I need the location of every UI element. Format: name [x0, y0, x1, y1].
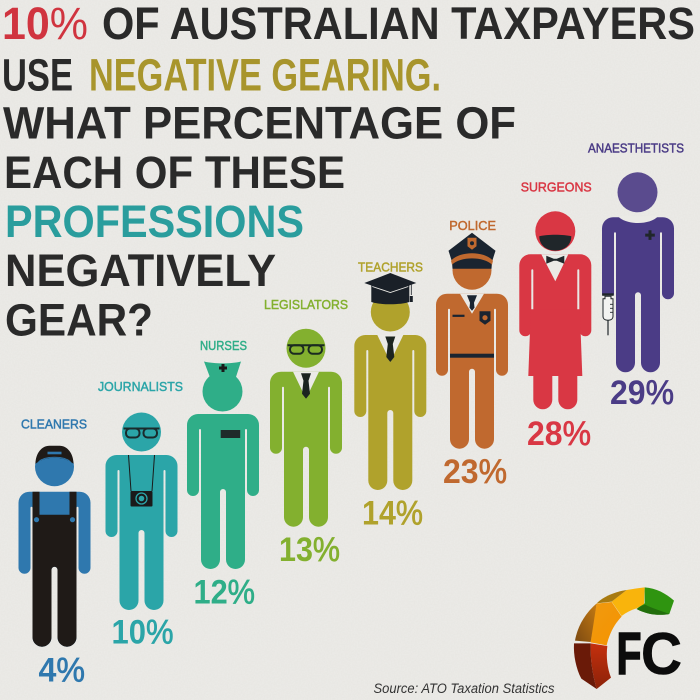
icon: mortarboard	[364, 273, 416, 304]
profession: anaesthetists: ANAESTHETISTS	[588, 140, 684, 155]
profession: police	[436, 218, 508, 491]
icon: glasses	[124, 428, 160, 438]
gauge: green segment	[637, 587, 674, 615]
title: WHAT PERCENTAGE OF	[3, 98, 516, 148]
profession: surgeons: 28%	[527, 415, 591, 453]
title: NEGATIVE GEARING.	[89, 50, 441, 100]
profession: journalists: 10%	[112, 613, 174, 651]
gauge: orange segment	[591, 602, 622, 645]
title: PROFESSIONS	[5, 196, 304, 247]
title	[2, 0, 695, 346]
profession: nurses: 12%	[194, 573, 255, 611]
profession: teachers: 14%	[362, 494, 423, 532]
title: EACH OF THESE	[4, 147, 345, 198]
profession: anaesthetists: 29%	[610, 374, 674, 412]
profession: legislators: 13%	[279, 531, 340, 569]
title: USE	[2, 50, 73, 100]
profession: legislators	[264, 297, 348, 569]
profession: surgeons	[519, 180, 592, 453]
logo: FC gauge: C	[641, 621, 682, 687]
profession: police: 23%	[443, 453, 507, 491]
gauge: green underside	[637, 605, 669, 615]
logo: FC gauge	[574, 587, 682, 689]
profession: cleaners: 4%	[38, 652, 85, 690]
title: GEAR?	[5, 294, 153, 346]
gauge: orange shadow	[575, 603, 597, 642]
gauge: yellow segment	[612, 587, 645, 616]
icon: camera	[128, 455, 154, 506]
logo: FC gauge: F	[616, 621, 642, 687]
profession: police: POLICE	[449, 218, 496, 233]
profession: surgeons: SURGEONS	[521, 180, 592, 195]
icon: police hat	[448, 233, 496, 269]
profession: journalists: JOURNALISTS	[98, 379, 183, 394]
icon: bow tie	[546, 256, 564, 264]
profession: nurses: NURSES	[200, 338, 247, 353]
profession: cleaners	[18, 416, 90, 690]
profession: nurses	[187, 338, 259, 611]
profession: journalists	[98, 379, 183, 651]
profession: teachers	[354, 259, 426, 532]
title: NEGATIVELY	[5, 245, 276, 296]
icon: police badge	[480, 311, 490, 325]
profession: anaesthetists	[588, 140, 684, 412]
icon: glasses	[288, 345, 324, 354]
gauge: red segment	[591, 643, 611, 689]
profession: teachers: TEACHERS	[358, 259, 423, 274]
profession: legislators: LEGISLATORS	[264, 297, 348, 312]
gauge: top edge	[597, 590, 627, 603]
source note: Source: ATO Taxation Statistics	[374, 681, 555, 696]
icon: syringe	[601, 293, 615, 335]
icon: surgical mask	[539, 235, 571, 251]
gauge: dark red shadow	[574, 643, 597, 689]
profession: cleaners: CLEANERS	[21, 416, 87, 431]
icon: nurse hat	[204, 362, 241, 380]
